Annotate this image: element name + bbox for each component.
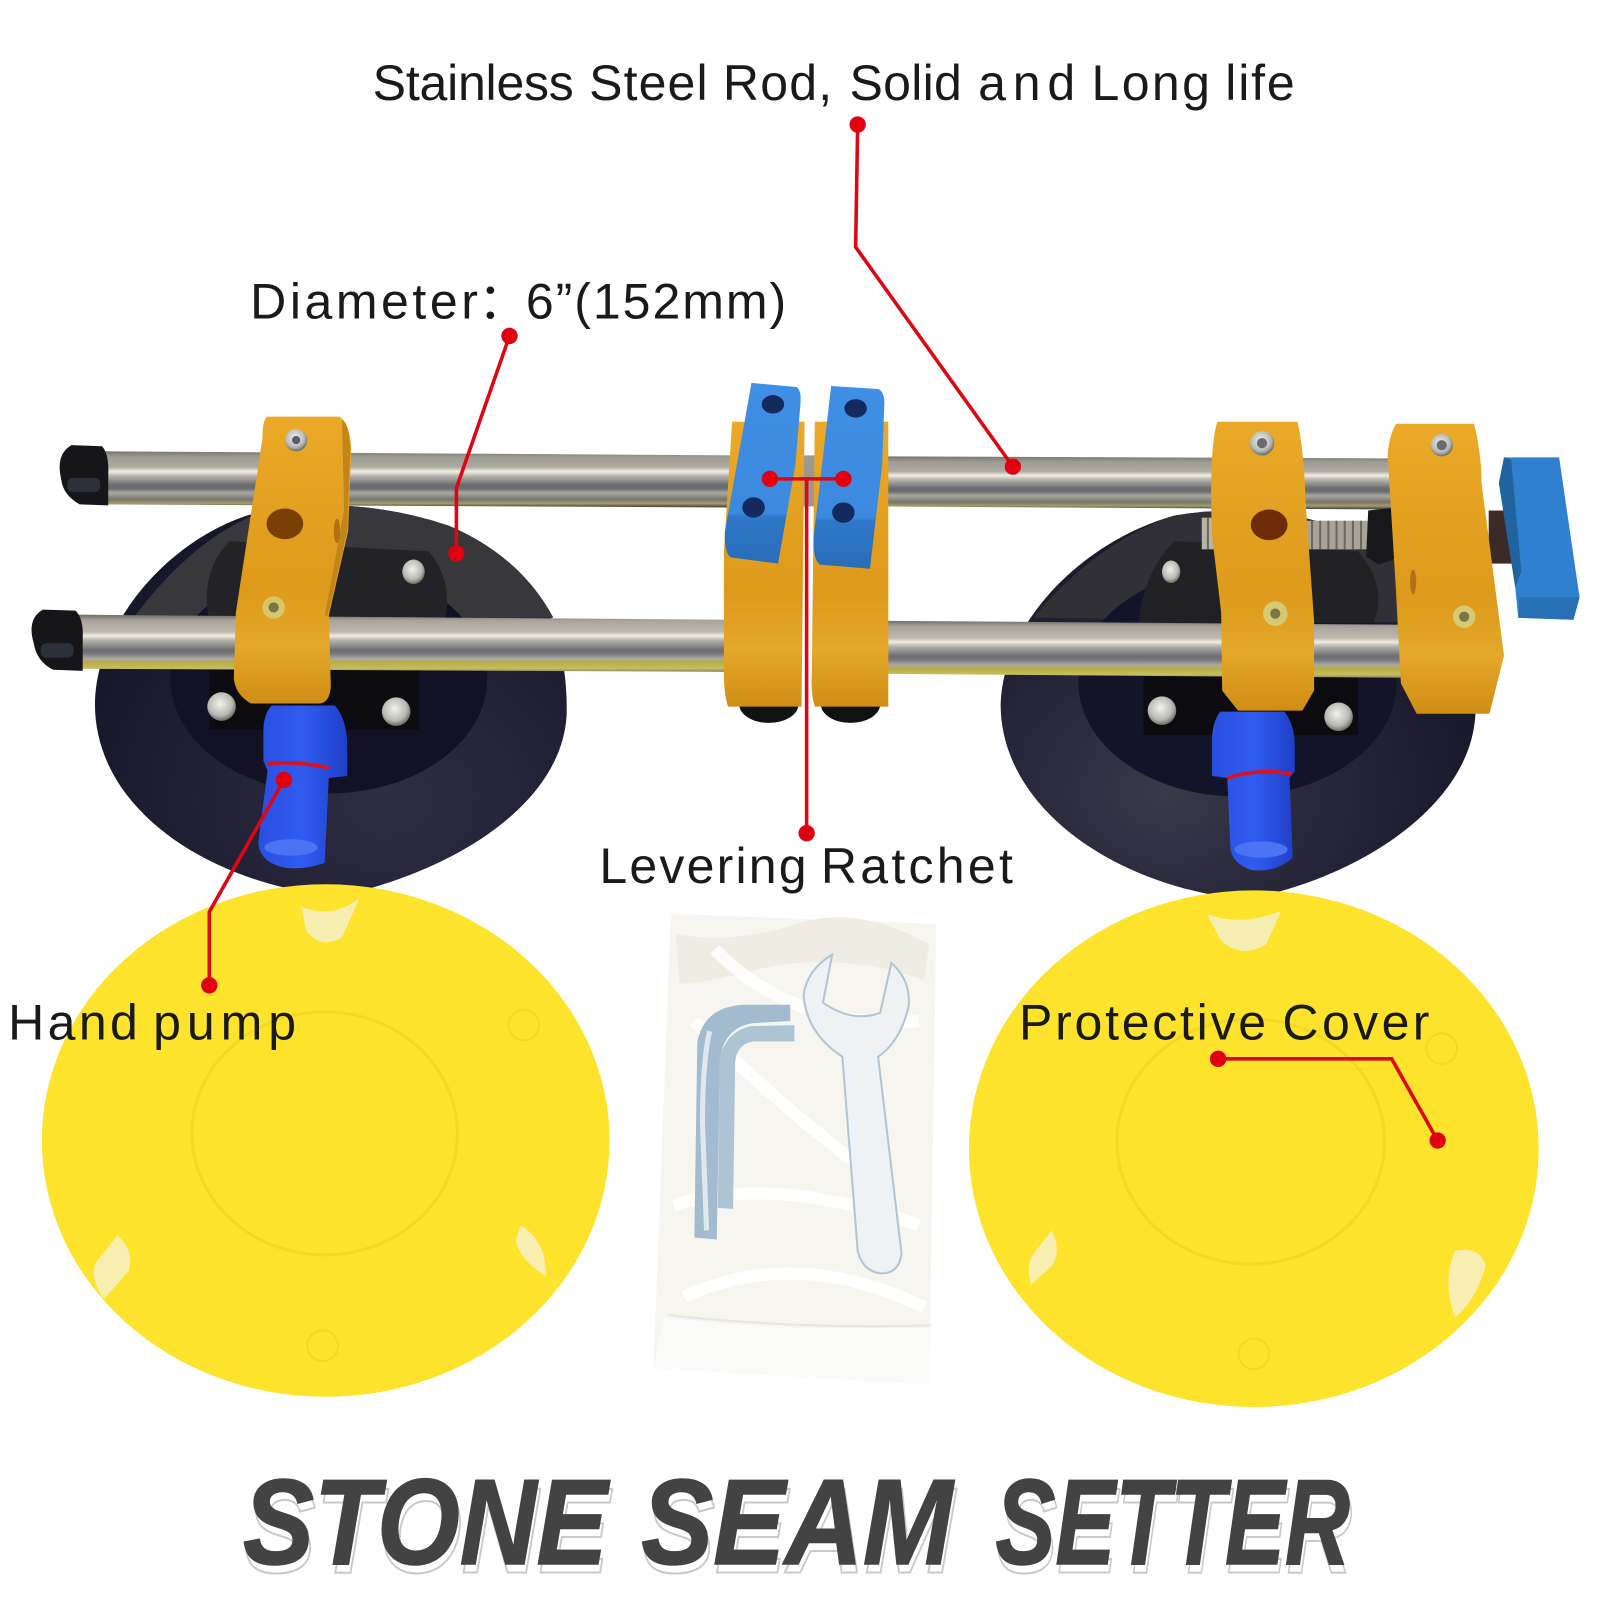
gold bracket right outer	[1389, 425, 1503, 713]
label: stainless steel rod: Solid	[850, 55, 962, 111]
ratchet gold block left	[724, 422, 805, 707]
label: stainless steel rod: and	[978, 55, 1075, 111]
hex keys	[694, 1005, 794, 1240]
gold bracket left	[235, 418, 350, 702]
ratchet blue block left	[725, 383, 801, 564]
suction cup left	[95, 505, 567, 896]
blue end clamp	[1499, 457, 1580, 620]
title: STONE	[245, 1462, 613, 1598]
label: diameter	[250, 274, 786, 330]
label: diameter: Diameter	[250, 274, 478, 330]
threaded bolt and nut	[1202, 507, 1521, 565]
label: levering ratchet	[599, 838, 1013, 894]
hand pump left	[258, 706, 347, 868]
yellow cover right	[969, 890, 1539, 1407]
title: SETTER	[998, 1462, 1352, 1598]
wrench	[804, 955, 909, 1273]
steel rod bottom	[77, 615, 1423, 678]
gold bracket right inner	[1212, 423, 1313, 710]
label: diameter: ：	[478, 274, 528, 330]
ratchet gold block right	[812, 422, 888, 707]
leader: protective cover	[1210, 1051, 1446, 1149]
ratchet blue block right	[814, 386, 884, 569]
label: stainless steel rod: Steel	[589, 55, 708, 111]
label: diameter: 6”(152mm)	[526, 274, 786, 330]
label: protective cover: Cover	[1282, 994, 1429, 1050]
label: hand pump	[8, 994, 296, 1050]
title: SETTER	[996, 1454, 1350, 1590]
label: stainless steel rod: Rod,	[723, 55, 832, 111]
leader: hand pump	[201, 772, 292, 993]
label: levering ratchet: Levering	[599, 838, 807, 894]
leader: diameter	[448, 328, 518, 562]
label: protective cover	[1019, 994, 1429, 1050]
yellow cover left	[42, 884, 610, 1397]
rod end cap bottom	[32, 610, 83, 671]
plastic bag with tools	[653, 914, 936, 1385]
ratchet feet	[739, 686, 880, 723]
levering ratchet	[724, 383, 888, 723]
label: hand pump: pump	[153, 994, 296, 1050]
leader: levering ratchet	[762, 471, 852, 841]
label: hand pump: Hand	[8, 994, 138, 1050]
label: stainless steel rod: Long	[1091, 55, 1210, 111]
hand pump right	[1212, 712, 1295, 870]
plastic bag	[653, 914, 936, 1385]
title: SEAM	[643, 1462, 957, 1598]
steel rod top	[102, 451, 1405, 510]
label: stainless steel rod: life	[1225, 55, 1295, 111]
label: stainless steel rod: Stainless	[373, 55, 574, 111]
label: stainless steel rod	[373, 55, 1295, 111]
leader: stainless steel rod	[850, 116, 1021, 475]
title: STONE	[243, 1454, 611, 1590]
label: levering ratchet: Ratchet	[821, 838, 1013, 894]
title: SEAM	[641, 1454, 955, 1590]
title	[243, 1454, 1352, 1598]
label: protective cover: Protective	[1019, 994, 1266, 1050]
suction cup right	[1001, 511, 1475, 900]
rod end cap top	[60, 445, 108, 505]
